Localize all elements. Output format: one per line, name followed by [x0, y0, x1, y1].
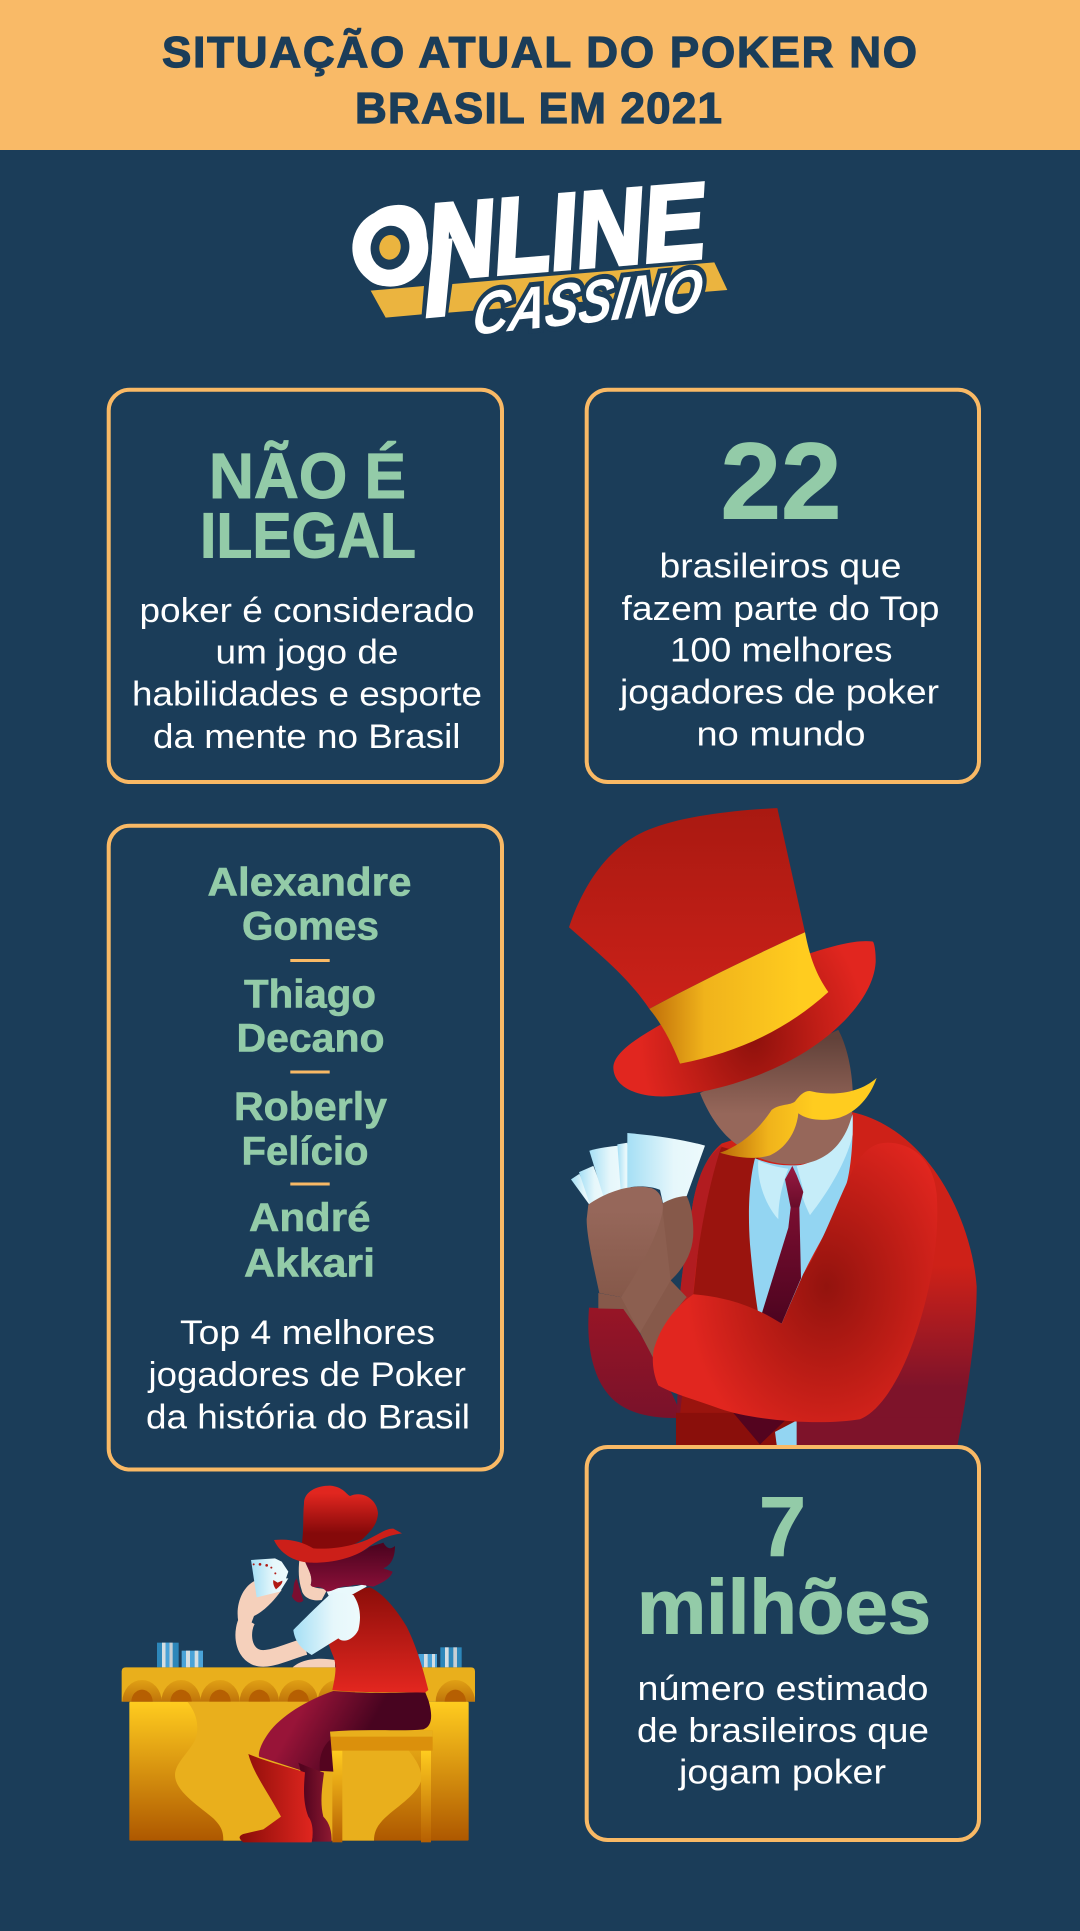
head — [274, 1486, 402, 1602]
stat: 22: 22 — [720, 420, 842, 542]
player names: Roberly — [234, 1085, 388, 1129]
head — [700, 1030, 853, 1164]
description text: poker é considerado — [140, 592, 474, 630]
description text: Top 4 melhores — [180, 1314, 435, 1352]
logo: Online Cassino: CASSINO — [469, 256, 707, 348]
poker chips — [157, 1643, 462, 1667]
panel: 7 milhões — [587, 1447, 979, 1840]
description text — [637, 1670, 929, 1792]
stool — [330, 1731, 433, 1842]
stat: 7 milhões: milhões — [637, 1564, 931, 1650]
description text: jogam poker — [678, 1754, 886, 1792]
description text: no mundo — [696, 716, 866, 754]
description text: brasileiros que — [660, 548, 902, 586]
description text: jogadores de Poker — [147, 1356, 466, 1394]
description text: habilidades e esporte — [132, 676, 482, 714]
shirt — [749, 1114, 853, 1325]
front arm — [653, 1143, 937, 1422]
description text — [132, 592, 482, 756]
back sleeve — [588, 1308, 683, 1418]
description text: jogadores de poker — [619, 673, 939, 711]
description text: 100 melhores — [670, 632, 892, 670]
lower body — [240, 1691, 431, 1842]
stat: 7 milhões: 7 — [759, 1480, 806, 1574]
cards in hand — [251, 1558, 288, 1597]
title — [162, 27, 917, 133]
stat: 7 milhões — [637, 1480, 931, 1650]
heading: não é ilegal — [200, 440, 416, 572]
illustration: player at poker table — [122, 1486, 475, 1842]
player names: Decano — [236, 1016, 384, 1060]
description text: de brasileiros que — [637, 1712, 929, 1750]
panel: top 4 jogadores — [109, 826, 502, 1470]
tie — [762, 1208, 801, 1324]
description text: número estimado — [638, 1670, 928, 1708]
description text: da mente no Brasil — [153, 718, 460, 756]
illustration: man with top hat holding cards — [569, 808, 977, 1450]
description text: um jogo de — [216, 634, 398, 672]
player names: Felício — [242, 1130, 368, 1174]
title: SITUAÇÃO ATUAL DO POKER NO — [162, 27, 917, 77]
player names: Gomes — [242, 904, 379, 948]
panel: 22 brasileiros — [587, 390, 979, 782]
player names: André — [249, 1196, 370, 1240]
description text: fazem parte do Top — [622, 590, 940, 628]
panel: não é ilegal — [109, 390, 502, 782]
player names: Alexandre — [208, 860, 412, 904]
hands — [587, 1187, 693, 1358]
player names — [208, 860, 412, 1286]
heading: não é ilegal: ILEGAL — [200, 500, 416, 572]
jacket — [676, 1112, 977, 1450]
description text — [619, 548, 940, 754]
header banner — [0, 0, 1080, 150]
title: BRASIL EM 2021 — [355, 84, 722, 133]
table — [122, 1667, 475, 1841]
heading: não é ilegal: NÃO É — [209, 440, 406, 512]
player names: Akkari — [244, 1242, 375, 1286]
player names: Thiago — [244, 972, 376, 1016]
cards — [571, 1133, 705, 1205]
moustache — [720, 1078, 877, 1158]
hat brim — [613, 941, 876, 1096]
description text: da história do Brasil — [146, 1398, 470, 1436]
hat band — [649, 932, 828, 1064]
logo: Online Cassino: ONLINE — [353, 161, 709, 309]
arm and hand — [238, 1580, 335, 1667]
hat crown — [569, 808, 805, 1009]
description text — [146, 1314, 470, 1436]
torso — [293, 1583, 428, 1693]
